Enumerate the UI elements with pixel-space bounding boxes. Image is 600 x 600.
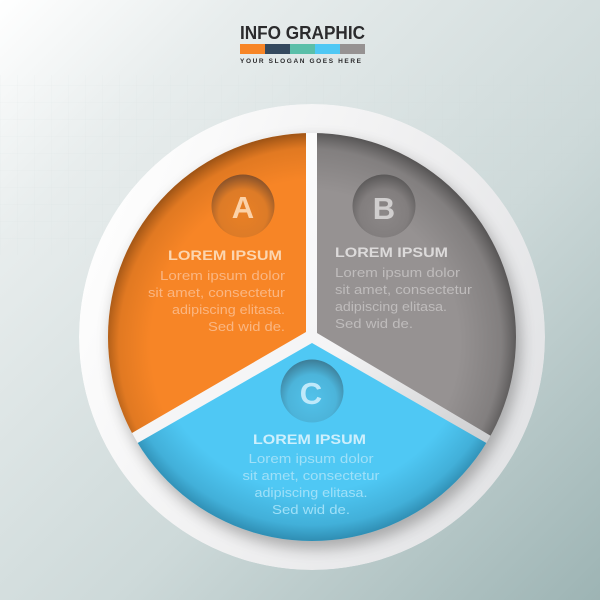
letter A: A: [232, 190, 254, 225]
body text C: Lorem ipsum dolor: [248, 451, 374, 466]
body text B: Lorem ipsum dolor: [335, 265, 461, 280]
body text B: sit amet, consectetur: [335, 282, 473, 297]
body text C: [242, 451, 380, 517]
title: INFO GRAPHIC: [240, 22, 365, 43]
panel: segment B grey: [317, 133, 516, 436]
title block: [240, 22, 365, 65]
panel: segment C blue: [138, 343, 486, 541]
outer ring: [79, 104, 545, 570]
slogan: YOUR SLOGAN GOES HERE: [240, 58, 362, 65]
colour bar: [240, 44, 365, 54]
heading C: LOREM IPSUM: [253, 431, 366, 447]
body text B: [335, 265, 473, 331]
body text A: sit amet, consectetur: [148, 285, 286, 300]
body text A: Sed wid de.: [208, 319, 285, 334]
badge B: [352, 174, 416, 238]
heading A: LOREM IPSUM: [168, 247, 282, 263]
heading B: LOREM IPSUM: [335, 244, 448, 260]
body text A: Lorem ipsum dolor: [160, 268, 286, 283]
body text B: Sed wid de.: [335, 316, 413, 331]
body text B: adipiscing elitasa.: [335, 299, 447, 314]
letter B: B: [373, 191, 395, 226]
panel: segment A orange: [108, 133, 306, 433]
body text A: adipiscing elitasa.: [172, 302, 285, 317]
inner disc gutter: [108, 133, 516, 541]
body text C: adipiscing elitasa.: [254, 485, 368, 500]
body text A: [148, 268, 286, 334]
badge A: [212, 174, 274, 238]
letter C: C: [300, 376, 322, 411]
body text C: sit amet, consectetur: [242, 468, 380, 483]
body text C: Sed wid de.: [272, 502, 350, 517]
badge C: [280, 360, 344, 422]
